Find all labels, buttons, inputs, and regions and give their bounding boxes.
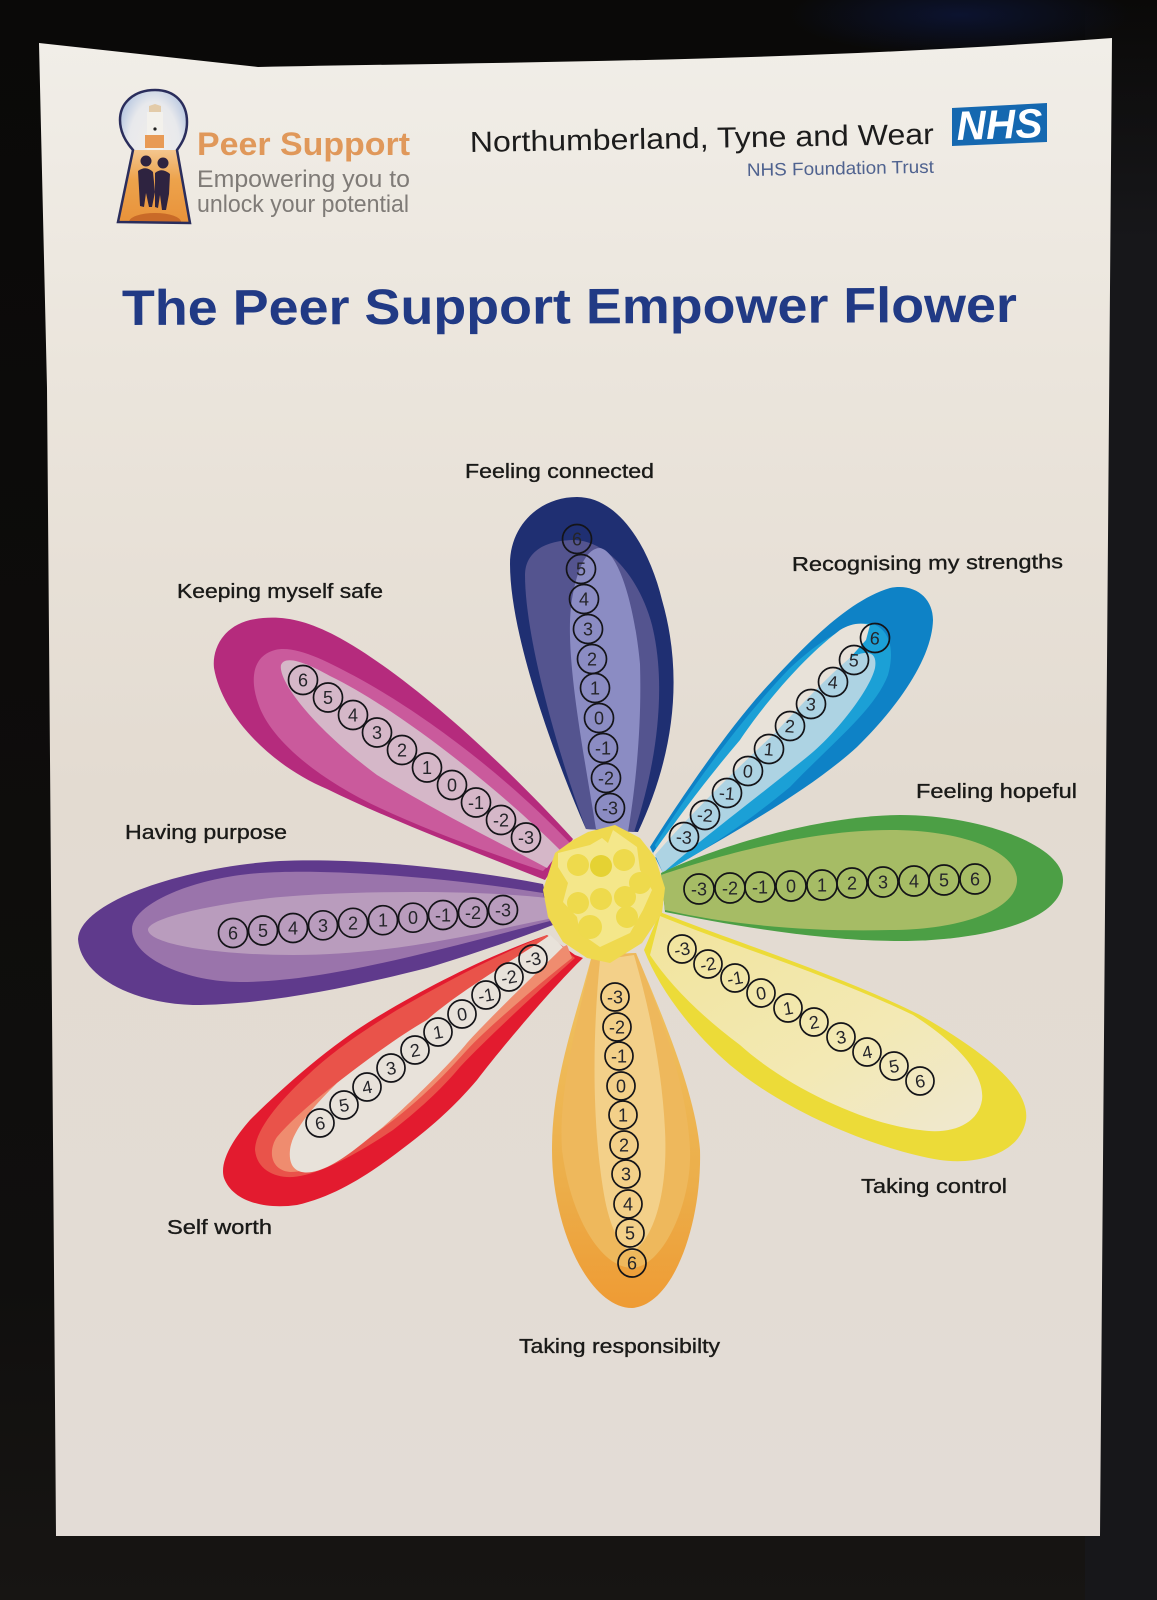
scale: feeling connected: 6 — [572, 530, 582, 550]
scale: having purpose — [218, 896, 518, 948]
scale: taking responsibility: 6 — [627, 1254, 637, 1274]
label: taking responsibility: Taking responsibilty — [519, 1336, 720, 1358]
scale: taking responsibility: -3 — [607, 988, 623, 1008]
scale: recognising my strengths — [670, 624, 890, 852]
petal: self worth — [223, 935, 583, 1206]
scale: taking control: -2 — [698, 953, 718, 976]
scale: keeping myself safe: 1 — [422, 758, 432, 778]
logo tagline: Empowering you to — [197, 166, 410, 193]
scale: self worth: -1 — [476, 984, 496, 1007]
petal: taking responsibility — [552, 953, 700, 1308]
scale: feeling hopeful — [684, 864, 990, 904]
scale: self worth — [306, 945, 547, 1137]
scale: taking responsibility: -2 — [609, 1018, 625, 1038]
scale: keeping myself safe: 4 — [348, 706, 358, 726]
label: taking control: Taking control — [861, 1176, 1007, 1198]
scale: self worth: -3 — [523, 948, 543, 971]
petal: taking control — [644, 912, 1026, 1161]
label: recognising my strengths: Recognising my strengths — [792, 551, 1063, 576]
scale: self worth: -2 — [499, 966, 519, 989]
scale: feeling hopeful: 2 — [847, 874, 857, 894]
scale: having purpose: 2 — [348, 913, 358, 933]
scale: feeling hopeful: 4 — [909, 872, 919, 892]
scale: recognising my strengths: 2 — [784, 716, 796, 737]
scale: recognising my strengths: 6 — [869, 628, 881, 649]
petal: having purpose — [78, 860, 553, 1005]
scale: keeping myself safe: 5 — [323, 688, 333, 708]
scale: keeping myself safe: 3 — [372, 723, 382, 743]
scale: feeling connected: -2 — [598, 768, 614, 788]
label: having purpose: Having purpose — [125, 822, 287, 844]
label: feeling connected: Feeling connected — [465, 461, 654, 483]
scale: taking responsibility: -1 — [611, 1046, 627, 1066]
scale: taking control: 5 — [887, 1056, 901, 1077]
scale: feeling connected — [562, 524, 624, 822]
scale: keeping myself safe: 2 — [397, 740, 407, 760]
scale: recognising my strengths: 5 — [848, 650, 860, 671]
scale: taking control: 6 — [913, 1071, 927, 1092]
scale: feeling connected: 5 — [576, 560, 586, 580]
scale: having purpose: 4 — [288, 918, 298, 938]
header: trust name — [470, 119, 934, 180]
scale: having purpose: -3 — [495, 900, 511, 920]
scale: keeping myself safe: -2 — [493, 810, 509, 830]
icon: NHS logo: NHS — [956, 100, 1043, 149]
header: peer support logo — [118, 90, 410, 231]
scale: feeling connected: 0 — [594, 708, 604, 728]
scale: feeling hopeful: 6 — [970, 870, 980, 890]
logo tagline — [197, 166, 410, 218]
scale: feeling hopeful: 5 — [939, 870, 949, 890]
scale: taking responsibility: 1 — [618, 1106, 628, 1126]
flower diagram — [78, 497, 1063, 1308]
scale: feeling hopeful: 1 — [817, 876, 827, 896]
scale: having purpose: -2 — [465, 903, 481, 923]
scale: feeling connected: 4 — [579, 590, 589, 610]
scale: taking control: 4 — [860, 1042, 874, 1063]
scale: taking control: 1 — [781, 998, 795, 1019]
scale: taking responsibility — [601, 983, 646, 1277]
scale: feeling connected: -1 — [595, 738, 611, 758]
scale: self worth: 6 — [313, 1113, 327, 1134]
scale: feeling connected: 2 — [587, 650, 597, 670]
scale: recognising my strengths: 1 — [763, 739, 775, 760]
scale: recognising my strengths: -2 — [696, 805, 714, 826]
scale: recognising my strengths: 0 — [742, 761, 754, 782]
scale: keeping myself safe: -3 — [518, 828, 534, 848]
scale: feeling connected: -3 — [602, 798, 618, 818]
scale: feeling hopeful: -1 — [752, 878, 768, 898]
icon: keyhole with lighthouse and two figures — [118, 90, 190, 231]
scale: feeling connected: 3 — [583, 620, 593, 640]
scale: taking control: 3 — [834, 1027, 848, 1048]
scale: feeling connected: 1 — [590, 678, 600, 698]
scale: having purpose: -1 — [435, 906, 451, 926]
scale: feeling hopeful: 0 — [786, 876, 796, 896]
petal: feeling connected — [510, 497, 674, 832]
scale: having purpose: 3 — [318, 916, 328, 936]
label: feeling hopeful: Feeling hopeful — [916, 781, 1077, 803]
petal: keeping myself safe — [214, 618, 573, 880]
scale: keeping myself safe: 6 — [298, 670, 308, 690]
scale: feeling hopeful: -2 — [722, 878, 738, 898]
label: self worth: Self worth — [167, 1217, 272, 1239]
scale: taking responsibility: 2 — [619, 1136, 629, 1156]
petal: feeling hopeful — [661, 815, 1063, 941]
scale: keeping myself safe: 0 — [447, 776, 457, 796]
scale: recognising my strengths: -1 — [718, 783, 736, 804]
scale: taking control: 2 — [807, 1012, 821, 1033]
scale: self worth: 1 — [431, 1022, 445, 1043]
scale: taking responsibility: 5 — [625, 1224, 635, 1244]
scale: having purpose: 1 — [378, 911, 388, 931]
title: The Peer Support Empower Flower — [122, 277, 1017, 336]
scale: taking control: -3 — [672, 938, 692, 961]
scale: taking control: -1 — [725, 967, 745, 990]
scale: feeling hopeful: 3 — [878, 872, 888, 892]
scale: keeping myself safe: -1 — [468, 793, 484, 813]
scale: self worth: 2 — [408, 1040, 422, 1061]
scale: recognising my strengths: 3 — [805, 694, 817, 715]
logo title: Peer Support — [197, 126, 410, 162]
scale: taking responsibility: 0 — [616, 1076, 626, 1096]
label: keeping myself safe: Keeping myself safe — [177, 581, 383, 603]
header: trust name: Northumberland, Tyne and Wear — [470, 119, 934, 159]
scale: self worth: 3 — [384, 1058, 398, 1079]
scale: having purpose: 6 — [228, 924, 238, 944]
flower centre — [543, 825, 665, 963]
trust subtitle: NHS Foundation Trust — [747, 157, 934, 180]
petal: recognising my strengths — [650, 587, 933, 873]
scale: taking responsibility: 3 — [621, 1164, 631, 1184]
scale: taking responsibility: 4 — [623, 1194, 633, 1214]
scale: taking control: 0 — [754, 983, 768, 1004]
scale: having purpose: 5 — [258, 921, 268, 941]
scale: feeling hopeful: -3 — [691, 880, 707, 900]
scale: recognising my strengths: 4 — [827, 672, 839, 693]
scale: recognising my strengths: -3 — [675, 827, 693, 848]
scale: self worth: 4 — [360, 1077, 374, 1098]
scale: having purpose: 0 — [408, 908, 418, 928]
scale: self worth: 5 — [337, 1095, 351, 1116]
scale: keeping myself safe — [288, 666, 540, 852]
scale: self worth: 0 — [455, 1004, 469, 1025]
scale: taking control — [668, 935, 934, 1095]
logo tagline: unlock your potential — [197, 191, 409, 218]
